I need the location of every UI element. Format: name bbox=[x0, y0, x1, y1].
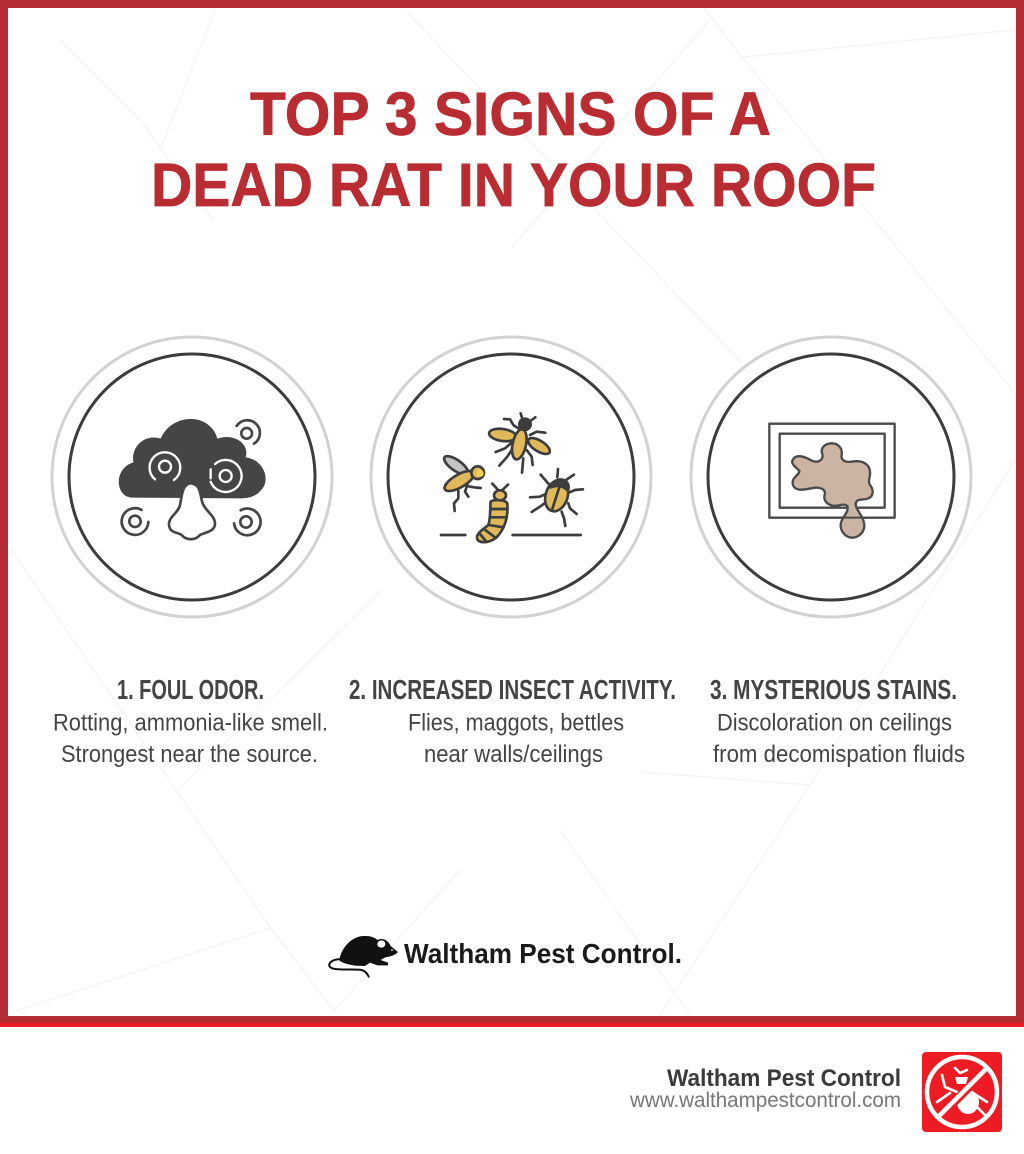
text block: mysterious stains bbox=[710, 674, 965, 768]
title bbox=[151, 80, 876, 219]
icon: stink cloud and nose bbox=[119, 419, 266, 539]
text block: mysterious stains: Discoloration on ceilings bbox=[717, 710, 952, 736]
text block: increased insect activity: near walls/ceilings bbox=[424, 741, 603, 768]
text block: foul odor: Rotting, ammonia-like smell. bbox=[53, 710, 328, 736]
text block: foul odor: Strongest near the source. bbox=[61, 741, 318, 768]
text block: foul odor bbox=[53, 674, 328, 768]
footer brand text: Waltham Pest Control bbox=[667, 1065, 901, 1092]
icon: rat silhouette bbox=[329, 936, 398, 977]
text block: increased insect activity: Flies, maggots, bettles bbox=[408, 710, 624, 736]
title: TOP 3 SIGNS OF A bbox=[250, 80, 771, 148]
icon: no bugs badge bbox=[922, 1052, 1002, 1132]
icon: insects bbox=[441, 413, 583, 542]
panel: mysterious stains icon circle bbox=[691, 337, 971, 617]
footer brand text bbox=[629, 1065, 901, 1112]
text block: foul odor: 1. FOUL ODOR. bbox=[117, 674, 264, 705]
text block: mysterious stains: from decomispation fluids bbox=[713, 741, 965, 768]
title: DEAD RAT IN YOUR ROOF bbox=[151, 151, 876, 219]
text block: increased insect activity bbox=[349, 674, 676, 768]
panel: insect activity icon circle bbox=[371, 337, 651, 617]
icon: ceiling stain bbox=[769, 424, 895, 538]
text block: increased insect activity: 2. INCREASED INSECT ACTIVITY. bbox=[349, 674, 676, 705]
footer brand text: www.walthampestcontrol.com bbox=[629, 1089, 901, 1112]
logo: rat and wordmark bbox=[329, 936, 682, 977]
panel: foul odor icon circle bbox=[52, 337, 332, 617]
logo: rat and wordmark: Waltham Pest Control. bbox=[404, 938, 682, 969]
